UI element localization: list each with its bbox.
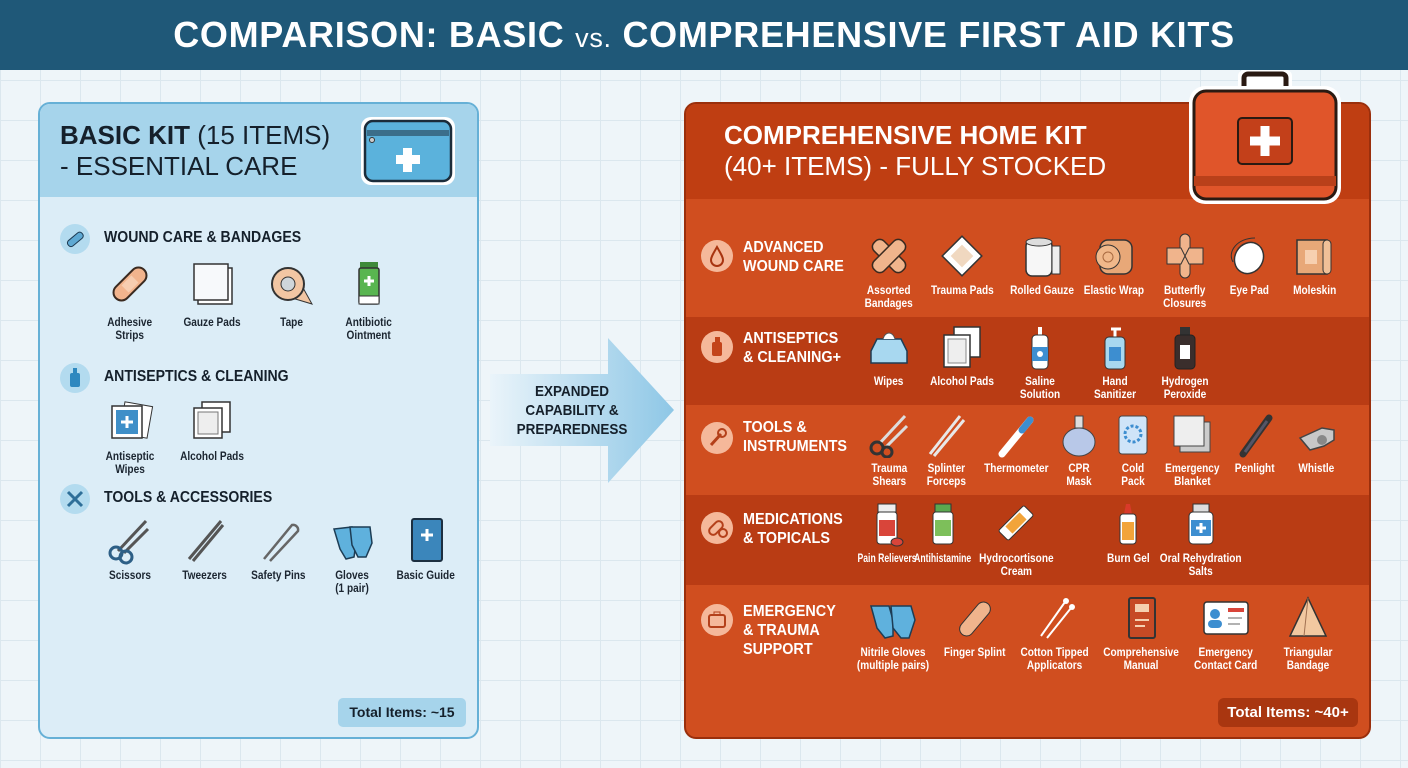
heading	[743, 419, 847, 455]
heading: ANTISEPTICS & CLEANING	[104, 368, 289, 385]
heading: SUPPORT	[743, 641, 813, 658]
item: tweezers	[182, 520, 227, 582]
section: antiseptics & cleaning	[60, 363, 289, 476]
heading: & TRAUMA	[743, 622, 820, 639]
row: advanced wound care: Butterfly	[1164, 283, 1206, 297]
row: antiseptics & cleaning+: Wipes	[874, 374, 904, 388]
heading: ANTISEPTICS	[743, 330, 838, 347]
row: medications & topicals: Pain Relievers	[857, 551, 917, 565]
row: emergency & trauma support: Nitrile Gloves	[861, 645, 925, 659]
row: antiseptics & cleaning+: Peroxide	[1164, 387, 1206, 401]
row: medications & topicals: Salts	[1189, 564, 1213, 578]
item: antibiotic ointment: Ointment	[347, 328, 391, 342]
header bar	[0, 0, 1408, 70]
heading	[743, 511, 843, 547]
row: antiseptics & cleaning+	[701, 326, 1209, 401]
row: emergency & trauma support: Finger Splint	[944, 645, 1006, 659]
row: tools & instruments: Penlight	[1235, 461, 1275, 475]
heading: & CLEANING+	[743, 349, 841, 366]
icon: bandage circle	[60, 224, 90, 254]
heading: TOOLS &	[743, 419, 807, 436]
items: Bandages	[865, 296, 913, 310]
item: tweezers: Tweezers	[183, 568, 227, 582]
comprehensive title	[724, 120, 1106, 181]
row: antiseptics & cleaning+: Hydrogen	[1161, 374, 1209, 388]
heading: INSTRUMENTS	[743, 438, 847, 455]
icon: basic kit pouch	[361, 117, 455, 185]
row: advanced wound care: Trauma Pads	[931, 283, 993, 297]
row: emergency & trauma support: Cotton Tipped	[1021, 645, 1089, 659]
basic title: BASIC KIT (15 ITEMS)	[60, 120, 330, 150]
item: safety pins: Safety Pins	[251, 568, 305, 582]
row: tools & instruments: CPR	[1068, 461, 1090, 475]
row: medications & topicals: Hydrocortisone	[979, 551, 1053, 565]
arrow: expanded capability	[490, 338, 674, 483]
heading: WOUND CARE & BANDAGES	[104, 229, 301, 246]
row: advanced wound care: Closures	[1163, 296, 1207, 310]
row: tools & instruments: Emergency	[1165, 461, 1219, 475]
row: advanced wound care: Rolled Gauze	[1010, 283, 1074, 297]
arrow text: PREPAREDNESS	[517, 421, 627, 438]
icon circle: spray bottle	[701, 331, 733, 363]
row: tools & instruments: Cold	[1122, 461, 1144, 475]
item: antiseptic wipes: Antiseptic	[106, 449, 154, 463]
item: safety pins	[251, 524, 306, 582]
row: tools & instruments: Trauma	[871, 461, 907, 475]
section: wound care & bandages	[60, 224, 392, 342]
item: tape	[271, 267, 313, 329]
row: emergency & trauma support: Contact Card	[1194, 658, 1258, 672]
row: tools & instruments	[701, 414, 1335, 488]
icon circle: pills	[701, 512, 733, 544]
comprehensive title: COMPREHENSIVE HOME KIT	[724, 120, 1087, 150]
item: antibiotic ointment: Antibiotic	[346, 315, 392, 329]
heading: ADVANCED	[743, 239, 824, 256]
row: medications & topicals: Cream	[1000, 564, 1032, 578]
heading: MEDICATIONS	[743, 511, 843, 528]
arrow text	[517, 383, 627, 438]
row: emergency & trauma support	[701, 596, 1332, 672]
row: tools & instruments: Mask	[1066, 474, 1092, 488]
total items: comprehensive: Total Items: ~40+	[1227, 704, 1349, 721]
total items: comprehensive	[1218, 698, 1358, 727]
row: advanced wound care: Elastic Wrap	[1084, 283, 1144, 297]
item: adhesive strips: Adhesive	[108, 315, 152, 329]
icon: comprehensive kit case	[1189, 70, 1341, 204]
row: antiseptics & cleaning+: Sanitizer	[1094, 387, 1136, 401]
row: tools & instruments: Shears	[872, 474, 906, 488]
item: antiseptic wipes: Wipes	[115, 462, 145, 476]
icon: bottle circle	[60, 363, 90, 393]
item: scissors	[108, 520, 151, 582]
row: medications & topicals: Burn Gel	[1107, 551, 1149, 565]
item: gauze pads	[183, 263, 241, 329]
item: gloves	[333, 526, 373, 595]
row: antiseptics & cleaning+: Alcohol Pads	[930, 374, 994, 388]
row: tools & instruments: Pack	[1121, 474, 1145, 488]
heading: WOUND CARE	[743, 258, 844, 275]
row: medications & topicals: Oral Rehydration	[1160, 551, 1242, 565]
items: Assorted	[867, 283, 911, 297]
heading	[743, 330, 841, 366]
item: alcohol pads	[180, 401, 244, 463]
row: emergency & trauma support: Bandage	[1287, 658, 1329, 672]
row: tools & instruments: Forceps	[926, 474, 966, 488]
item: adhesive strips: Strips	[116, 328, 144, 342]
row: emergency & trauma support: (multiple pairs)	[857, 658, 929, 672]
comprehensive header band	[686, 104, 1373, 199]
total items: basic: Total Items: ~15	[349, 704, 455, 720]
basic title	[60, 120, 330, 181]
row backgrounds	[686, 317, 1372, 405]
row: antiseptics & cleaning+: Saline	[1025, 374, 1055, 388]
panel: basic kit	[38, 102, 479, 739]
item: basic guide	[397, 518, 455, 582]
row: medications & topicals	[701, 504, 1242, 578]
heading: TOOLS & ACCESSORIES	[104, 489, 272, 506]
row: advanced wound care: Moleskin	[1293, 283, 1337, 297]
item: alcohol pads: Alcohol Pads	[180, 449, 244, 463]
item: gauze pads: Gauze Pads	[183, 315, 241, 329]
item: antiseptic wipes	[106, 401, 154, 476]
heading: EMERGENCY	[743, 603, 836, 620]
item: antibiotic ointment	[346, 262, 392, 342]
arrow text: EXPANDED	[535, 383, 609, 400]
row: emergency & trauma support: Manual	[1124, 658, 1158, 672]
row: tools & instruments: Whistle	[1298, 461, 1334, 475]
row: emergency & trauma support: Applicators	[1027, 658, 1083, 672]
basic title: - ESSENTIAL CARE	[60, 151, 297, 181]
heading	[743, 603, 836, 658]
comprehensive title: (40+ ITEMS) - FULLY STOCKED	[724, 151, 1106, 181]
row: advanced wound care: Eye Pad	[1229, 283, 1269, 297]
icon circle: wrench	[701, 422, 733, 454]
total items: basic	[338, 698, 466, 727]
row: tools & instruments: Splinter	[927, 461, 965, 475]
row: emergency & trauma support: Emergency	[1199, 645, 1253, 659]
row: tools & instruments: Blanket	[1174, 474, 1210, 488]
section: tools & accessories	[60, 484, 455, 595]
heading	[743, 239, 844, 275]
row: antiseptics & cleaning+: Solution	[1020, 387, 1060, 401]
item: scissors: Scissors	[109, 568, 151, 582]
row: antiseptics & cleaning+: Hand	[1102, 374, 1128, 388]
arrow text: CAPABILITY &	[525, 402, 619, 419]
panel: comprehensive kit	[684, 102, 1371, 739]
item: basic guide: Basic Guide	[397, 568, 455, 582]
icon circle: drop	[701, 240, 733, 272]
row: emergency & trauma support: Comprehensive	[1103, 645, 1179, 659]
header bar: COMPARISON: BASIC vs. COMPREHENSIVE FIRST AID KITS	[173, 14, 1235, 55]
item: gloves: (1 pair)	[335, 581, 369, 595]
row: emergency & trauma support: Triangular	[1284, 645, 1332, 659]
basic header band	[40, 104, 481, 197]
item: gloves: Gloves	[335, 568, 369, 582]
item: tape: Tape	[281, 315, 303, 329]
item: adhesive strips	[108, 266, 152, 342]
row: tools & instruments: Thermometer	[984, 461, 1048, 475]
items	[865, 238, 913, 310]
icon circle: case	[701, 604, 733, 636]
row: advanced wound care	[701, 234, 1337, 310]
heading: & TOPICALS	[743, 530, 830, 547]
row: medications & topicals: Antihistamine	[914, 551, 972, 565]
icon: tools circle	[60, 484, 90, 514]
